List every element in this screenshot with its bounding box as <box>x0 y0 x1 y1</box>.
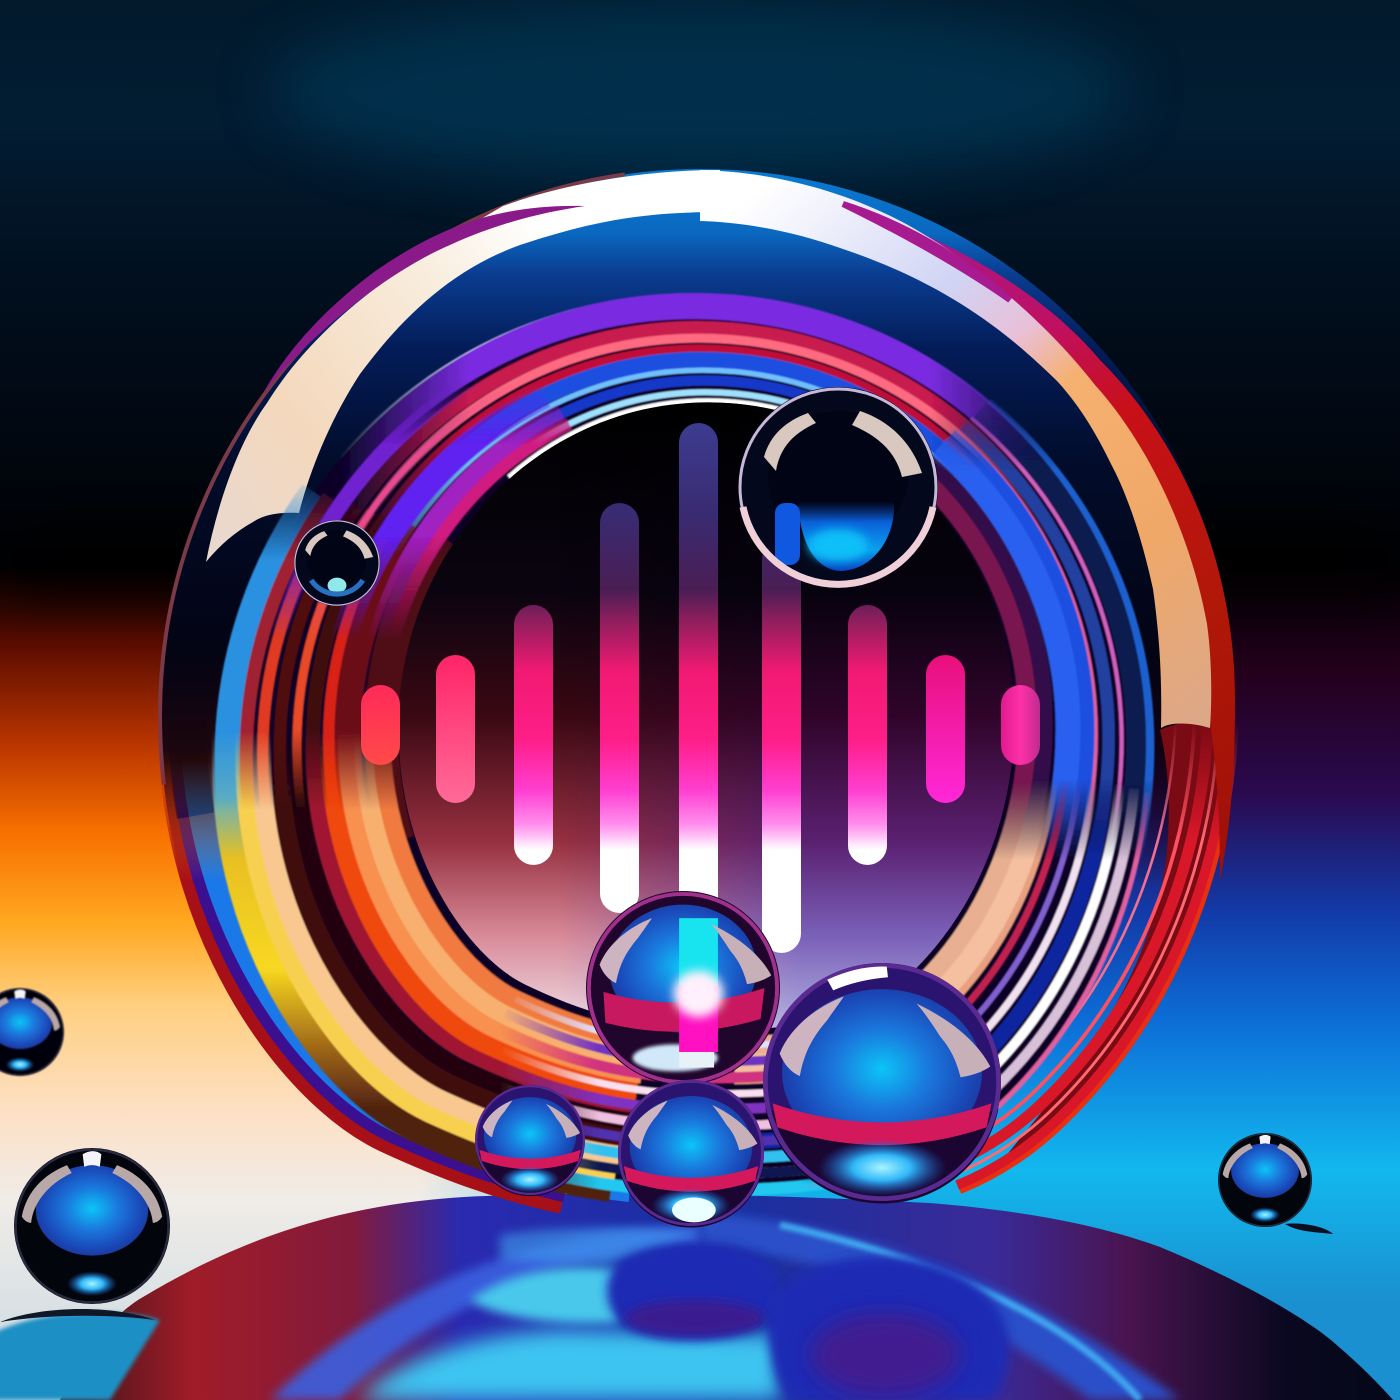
lower right red glass <box>990 700 1235 1175</box>
dark glass on left <box>170 758 214 819</box>
lower left rainbow bands <box>160 765 630 1214</box>
purple streak on left rim <box>262 206 585 395</box>
swirl lines: top <box>340 292 1060 701</box>
swirl lines: lower right <box>733 780 1150 1188</box>
swirl lines: upper left blend <box>272 380 573 640</box>
thin left rim <box>160 169 1235 1225</box>
swirl base <box>229 296 1149 1190</box>
ring body <box>160 169 1235 1225</box>
glass ring <box>160 169 1235 1225</box>
swirl <box>229 296 1149 1190</box>
left cream crescent <box>206 170 720 562</box>
bubble: far right on floor <box>1218 1133 1312 1227</box>
bubble: lower centre <box>618 1080 764 1228</box>
bubble: large lower right <box>763 963 1001 1203</box>
right red and magenta rim <box>843 205 1235 880</box>
swirl lines: right <box>932 399 1156 858</box>
bubble: small left on ring <box>294 520 380 606</box>
white inner edge at top <box>506 396 780 480</box>
bubble: upper right on ring <box>738 387 938 587</box>
sound wave bars <box>361 423 1040 953</box>
bubble: blurred at left edge <box>0 988 64 1076</box>
ring hole <box>398 402 1014 1030</box>
swirl lines: lower left <box>211 730 642 1203</box>
outer red streaks <box>955 725 1238 1194</box>
magenta streak over white <box>843 204 1010 300</box>
swirl lines: bottom <box>502 996 826 1196</box>
bubble: far left on floor <box>14 1148 170 1304</box>
top white and right peach highlight <box>700 170 1211 728</box>
bubble: lower left of centre <box>475 1085 585 1196</box>
swirl lines: left <box>214 484 453 840</box>
bubble: centre with magenta glow <box>586 891 780 1085</box>
ground shadow with ring reflection <box>0 1194 1393 1400</box>
